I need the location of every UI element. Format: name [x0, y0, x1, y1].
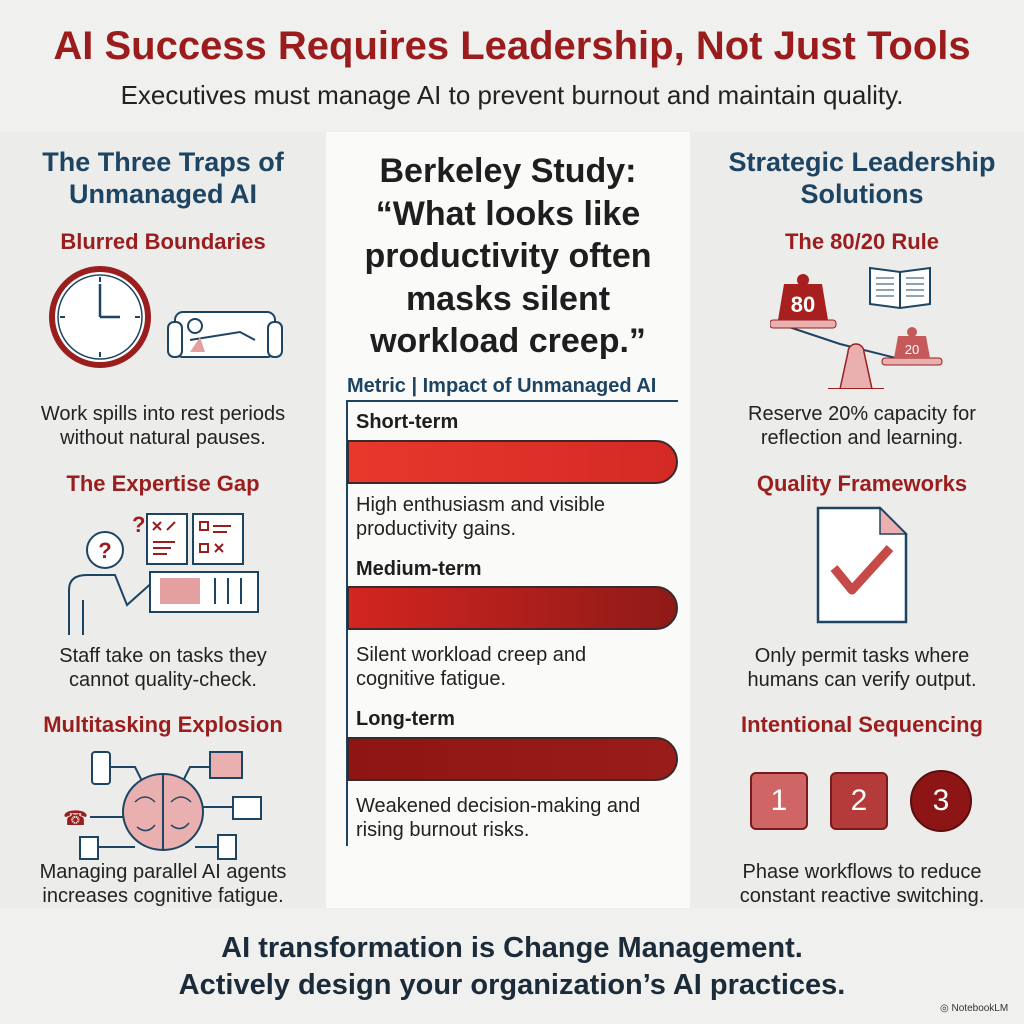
text: blurred: without natural pauses. [60, 427, 266, 449]
text: quality: humans can verify output. [747, 669, 976, 691]
panel: three traps [0, 132, 326, 908]
heading: traps [42, 147, 284, 209]
heading: solutions [728, 147, 996, 209]
subheading: blurred boundaries: Blurred Boundaries [60, 229, 266, 254]
text: multitasking: Managing parallel AI agents [40, 861, 286, 883]
text: long-term: rising burnout risks. [356, 819, 529, 841]
heading: solutions: Solutions [800, 179, 924, 209]
quote heading: productivity often [364, 237, 652, 275]
heading: traps: Unmanaged AI [69, 179, 257, 209]
text: 80/20: Reserve 20% capacity for [748, 403, 976, 425]
icon: scale with weights and book [770, 266, 942, 389]
icon: brain with devices: ☎ [63, 806, 88, 830]
subheading: 80/20: The 80/20 Rule [785, 229, 939, 254]
quote heading: Berkeley Study: [380, 152, 636, 190]
text: multitasking [40, 861, 286, 907]
panel: solutions [690, 132, 1024, 908]
text: expertise: Staff take on tasks they [59, 645, 267, 667]
icon: steps 1 2 3: 2 [851, 784, 867, 817]
text: short-term: productivity gains. [356, 518, 516, 540]
icon: brain with devices [63, 751, 262, 860]
icon: confused person at console: ? [132, 512, 145, 537]
heading: solutions: Strategic Leadership [728, 147, 996, 177]
subheading: multitasking: Multitasking Explosion [43, 712, 283, 737]
text: long-term: Weakened decision-making and [356, 795, 640, 817]
label: short-term: Short-term [356, 411, 458, 433]
logo: NotebookLM: ◎ NotebookLM [940, 1003, 1008, 1014]
text: medium-term [356, 644, 586, 690]
title: AI Success Requires Leadership, Not Just Tools [53, 24, 971, 68]
icon: scale with weights and book: 80 [791, 292, 815, 317]
text: blurred: Work spills into rest periods [41, 403, 285, 425]
subheading: quality frameworks: Quality Frameworks [757, 471, 967, 496]
text: sequencing [740, 861, 984, 907]
heading: traps: The Three Traps of [42, 147, 284, 177]
icon: clock and couch [49, 266, 283, 368]
icon: scale with weights and book: 20 [905, 342, 919, 357]
text: expertise: cannot quality-check. [69, 669, 257, 691]
subheading: sequencing: Intentional Sequencing [741, 712, 983, 737]
label: long-term: Long-term [356, 708, 455, 730]
quote heading: workload creep.” [370, 322, 646, 360]
text: expertise [59, 645, 267, 691]
text: short-term [356, 494, 605, 540]
quote heading: “What looks like [376, 194, 640, 232]
text: medium-term: Silent workload creep and [356, 644, 586, 666]
footer message: AI transformation is Change Management. [221, 932, 803, 964]
footer message [179, 932, 845, 1001]
text: quality: Only permit tasks where [755, 645, 969, 667]
icon: steps 1 2 3 [750, 770, 972, 832]
text: quality [747, 645, 976, 691]
icon: steps 1 2 3: 3 [933, 784, 949, 817]
text: 80/20: reflection and learning. [761, 427, 963, 449]
icon: steps 1 2 3: 1 [771, 784, 787, 817]
subtitle: Executives must manage AI to prevent burnout and maintain quality. [121, 80, 903, 110]
label: medium-term: Medium-term [356, 558, 482, 580]
text: multitasking: increases cognitive fatigue. [42, 885, 284, 907]
icon: document with check [816, 506, 908, 624]
quote heading: masks silent [406, 280, 610, 318]
table header: Metric | Impact of Unmanaged AI [347, 375, 656, 397]
table: timeline [346, 400, 678, 846]
text: sequencing: constant reactive switching. [740, 885, 984, 907]
text: medium-term: cognitive fatigue. [356, 668, 506, 690]
footer message: Actively design your organization’s AI practices. [179, 969, 845, 1001]
icon: confused person at console: ? [98, 538, 112, 563]
bar: medium-term [347, 586, 678, 630]
panel: center berkeley study [326, 132, 690, 908]
bar: short-term [347, 440, 678, 484]
text: long-term [356, 795, 640, 841]
text: sequencing: Phase workflows to reduce [742, 861, 982, 883]
text: blurred [41, 403, 285, 449]
quote heading [364, 152, 652, 360]
bar: long-term [347, 737, 678, 781]
text: short-term: High enthusiasm and visible [356, 494, 605, 516]
subheading: expertise gap: The Expertise Gap [66, 471, 260, 496]
icon: confused person at console [68, 512, 259, 635]
text: 80/20 [748, 403, 976, 449]
